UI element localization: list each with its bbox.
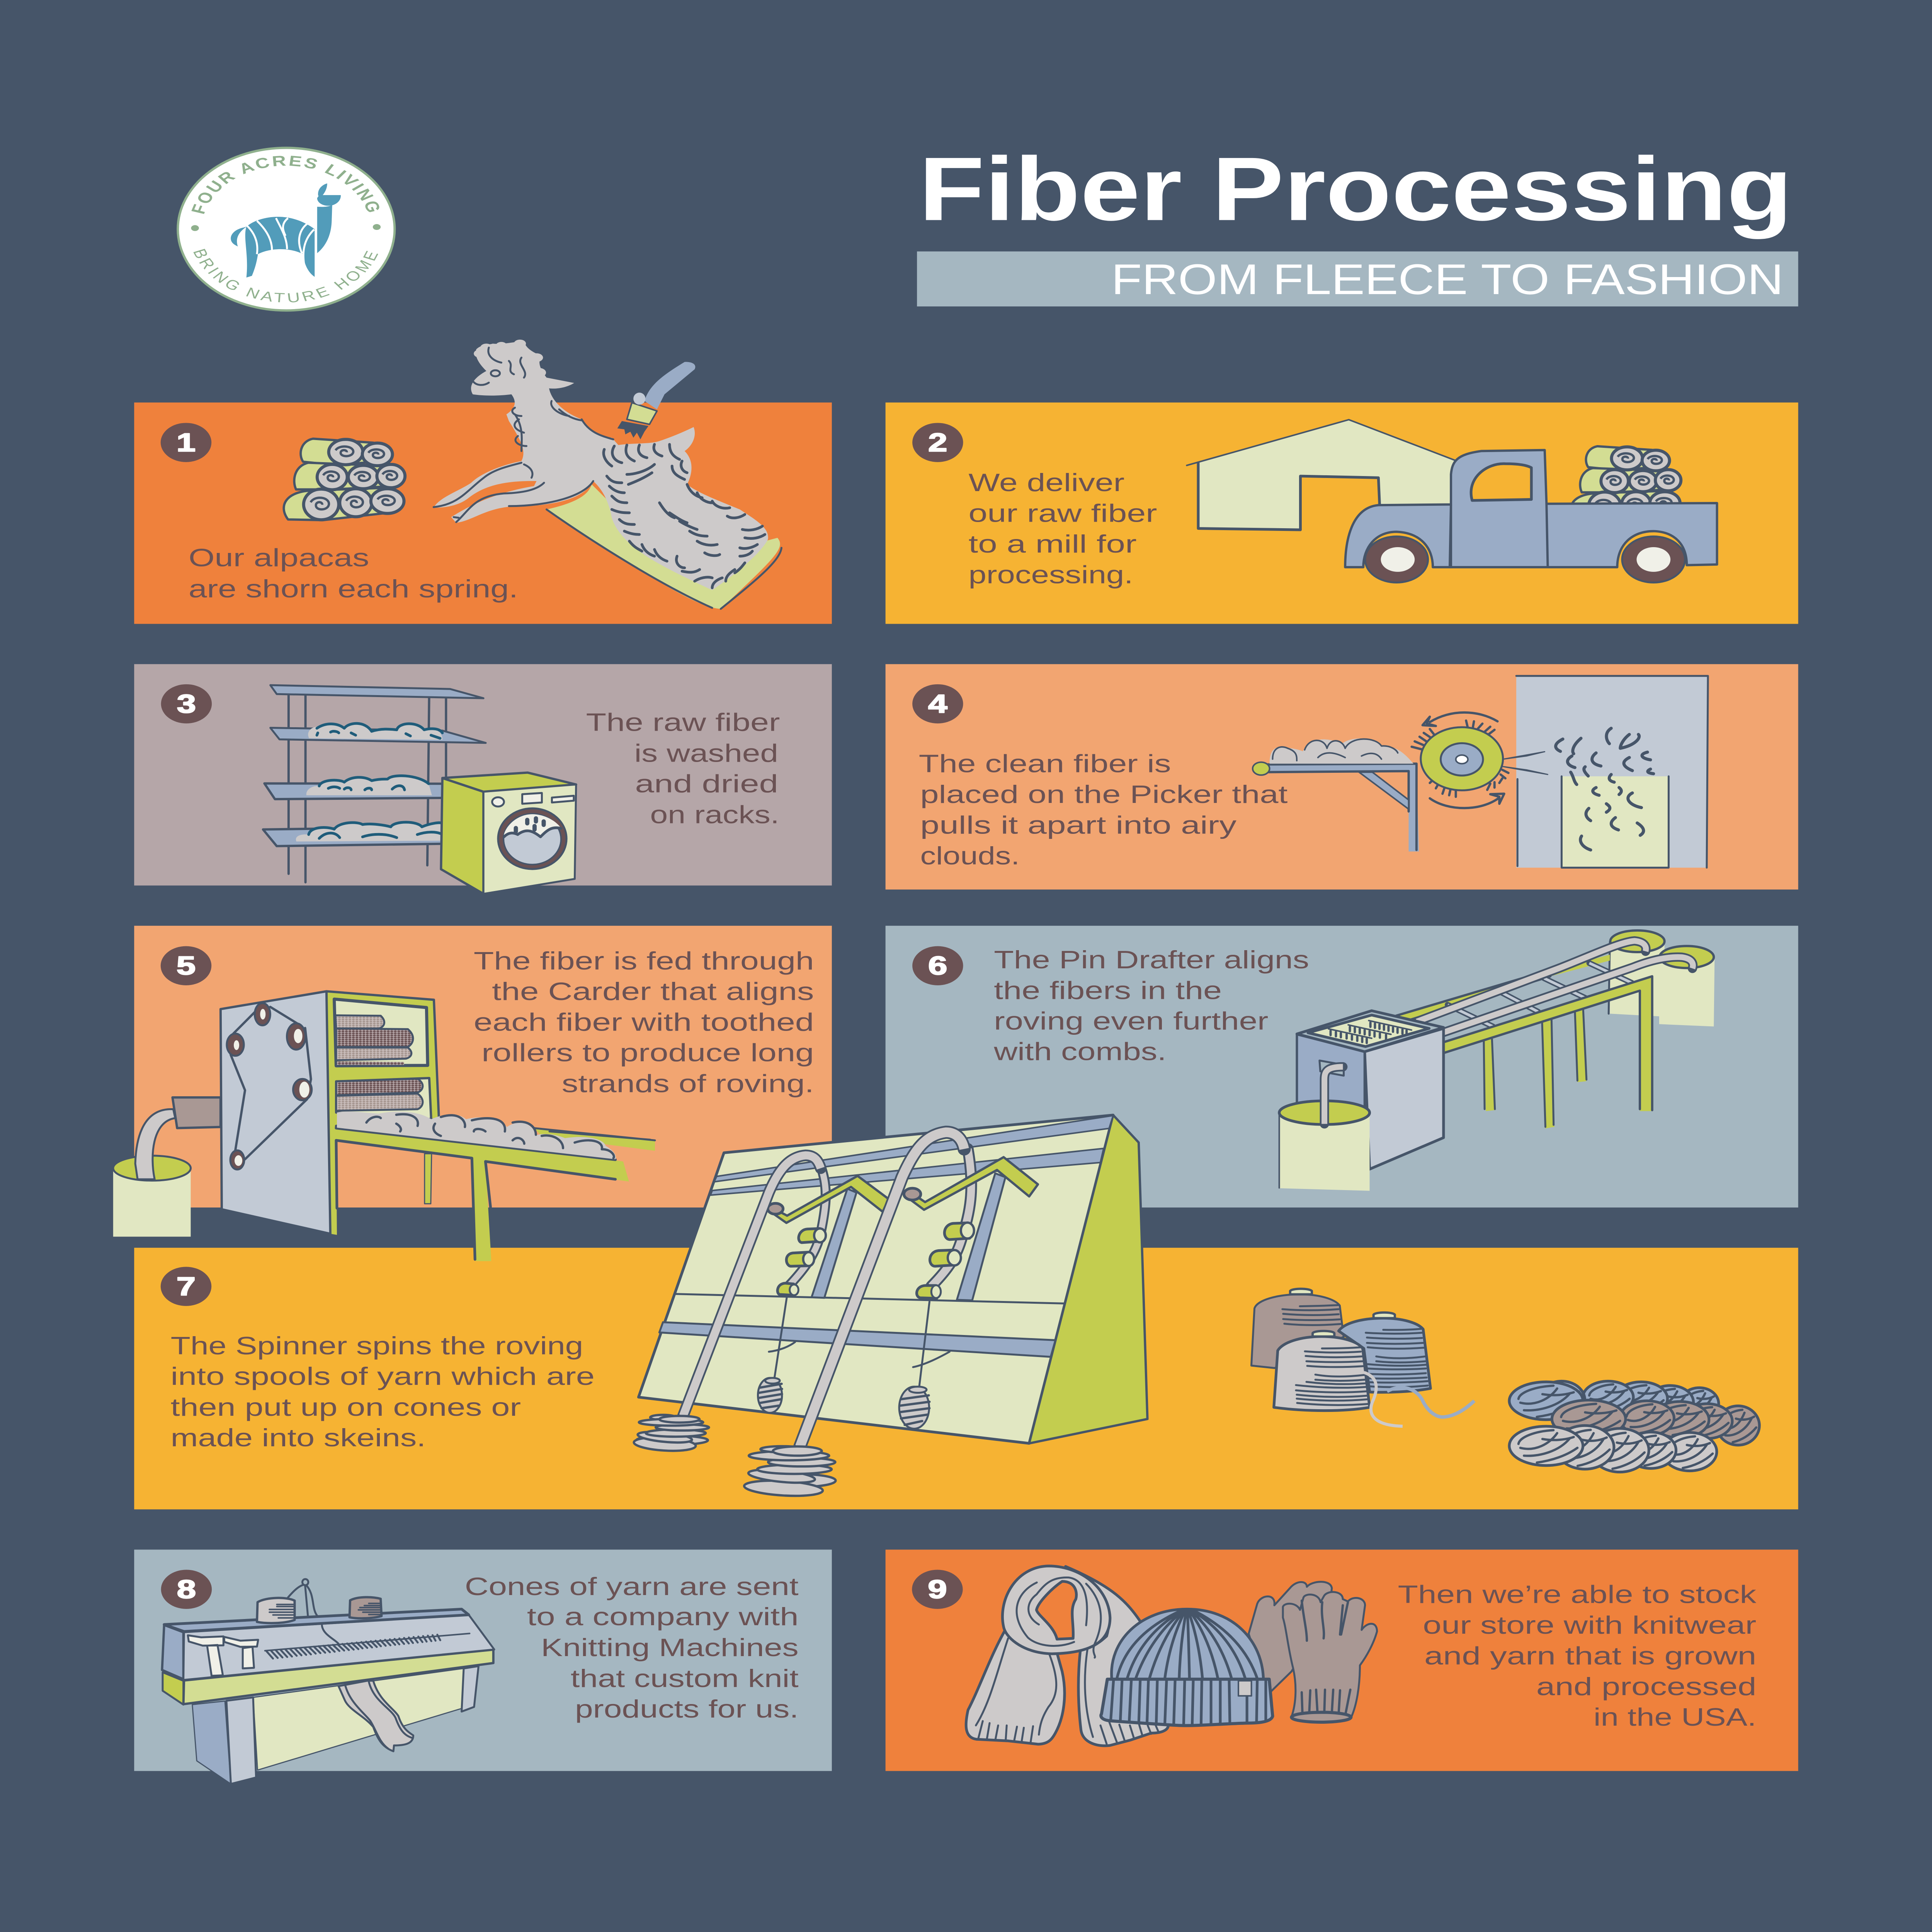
panel: step 5: the Carder that aligns [492,978,814,1006]
panel: step 8: to a company with [527,1603,799,1631]
illustration: yarn skeins [1509,1381,1759,1472]
title: Fiber Processing [919,139,1793,240]
subtitle bar [917,252,1798,306]
panel: step 5 [134,926,832,1208]
panel: step 8: Cones of yarn are sent [465,1572,799,1600]
panel: step 4: pulls it apart into airy [920,811,1237,839]
panel: step 1 [134,403,832,624]
panel: step 9: our store with knitwear [1423,1611,1756,1639]
panel: step 1: are shorn each spring. [189,575,518,603]
panel: step 3: and dried [635,770,778,798]
panel: step 5: each fiber with toothed [474,1008,814,1036]
panel: step 1: 1 [177,428,196,457]
panel: step 4: The clean fiber is [919,750,1171,778]
panel: step 8: Knitting Machines [541,1634,799,1662]
panel: step 4 [886,664,1798,889]
illustration: drying racks [263,685,486,882]
panel: step 3: 3 [177,689,196,718]
logo: Four Acres Living [178,148,395,310]
illustration: spinner machine [633,1115,1148,1498]
panel: step 8: products for us. [575,1695,799,1723]
panel: step 5: 5 [177,951,196,980]
panel: step 6 [886,926,1798,1208]
panel: step 7: into spools of yarn which are [171,1362,595,1390]
illustration: alpaca being shorn [434,340,781,609]
panel: step 7 [134,1248,1798,1509]
panel: step 6: with combs. [993,1037,1167,1066]
panel: step 9: and processed [1536,1672,1756,1701]
panel: step 3: The raw fiber [586,708,780,736]
illustration: barn [1187,420,1457,530]
illustration: knit hat [1101,1609,1273,1726]
panel: step 6: roving even further [994,1007,1268,1035]
panel: step 2: our raw fiber [968,499,1157,527]
subtitle bar: FROM FLEECE TO FASHION [1111,255,1784,303]
illustration: pin drafter [1279,930,1714,1191]
panel: step 1: Our alpacas [189,544,369,572]
panel: step 9: Then we’re able to stock [1398,1580,1757,1609]
panel: step 3 [134,664,832,886]
panel: step 9: in the USA. [1594,1703,1756,1731]
panel: step 7: then put up on cones or [171,1393,521,1421]
illustration: knitting machine [162,1579,494,1784]
panel: step 3: on racks. [650,801,779,829]
panel: step 2 [886,403,1798,624]
panel: step 3: is washed [634,739,778,767]
panel: step 4: placed on the Picker that [920,780,1287,808]
panel: step 9: and yarn that is grown [1424,1642,1756,1670]
panel: step 8: 8 [177,1575,196,1604]
panel: step 4: 4 [928,689,947,718]
panel: step 6: the fibers in the [994,976,1222,1005]
icon: fleece bales [284,439,405,520]
illustration: picker machine [1253,675,1708,867]
panel: step 9: 9 [928,1575,947,1604]
icon: bales in truck [1571,446,1681,520]
panel: step 6: 6 [928,951,947,980]
illustration: yarn cones [1251,1289,1475,1426]
illustration: gloves [1249,1582,1377,1722]
logo alpaca icon [231,184,341,277]
panel: step 2: processing. [968,561,1133,589]
illustration: pickup truck [1345,450,1717,583]
panel: step 2: 2 [928,428,947,457]
panel: step 7: made into skeins. [171,1424,426,1452]
panel: step 8: that custom knit [571,1664,799,1692]
illustration: washing machine [441,773,576,894]
panel: step 5: rollers to produce long [481,1039,814,1067]
panel: step 6: The Pin Drafter aligns [994,946,1309,974]
panel: step 2: We deliver [968,468,1124,497]
panel: step 7: 7 [177,1272,196,1301]
panel: step 7: The Spinner spins the roving [171,1332,583,1360]
panel: step 5: The fiber is fed through [474,947,814,975]
panel: step 8 [134,1549,832,1771]
illustration: carder machine [113,991,655,1261]
panel: step 5: strands of roving. [562,1070,814,1098]
logo top text: FOUR ACRES LIVING [187,153,385,216]
panel: step 4: clouds. [920,842,1020,870]
illustration: scarf [966,1566,1168,1746]
panel: step 9 [886,1549,1798,1771]
panel: step 2: to a mill for [968,530,1137,558]
logo bottom text: BRING NATURE HOME [189,247,383,306]
